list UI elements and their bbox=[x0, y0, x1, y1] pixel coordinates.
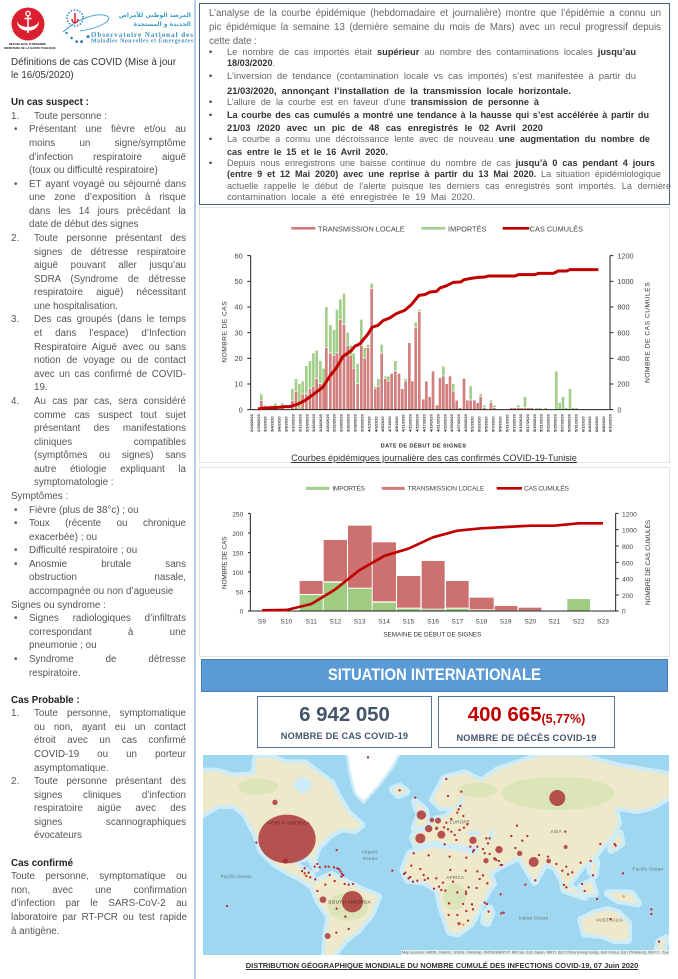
date labels: 6/4/2020 bbox=[587, 416, 592, 432]
axis labels: semaines: S10 bbox=[280, 619, 293, 626]
date labels: 3/4/2020 bbox=[270, 416, 275, 432]
date labels: 3/16/2020 bbox=[311, 413, 316, 432]
text block: définitions de cas: Toute personne : bbox=[34, 111, 107, 122]
date labels: 6/2/2020 bbox=[580, 416, 585, 432]
text block: définitions de cas: date de début des signes bbox=[29, 219, 138, 230]
axis title: nombre de cas: NOMBRE DE CAS bbox=[221, 536, 228, 589]
text block: définitions de cas: présentant des manifestations bbox=[34, 423, 186, 434]
text block: définitions de cas: COVID-19 ou un porteur bbox=[34, 749, 186, 760]
map labels: Indian Ocean bbox=[519, 916, 549, 921]
logo: observatoire national: المرصد الوطني للأمراض bbox=[119, 11, 191, 19]
date labels: 5/23/2020 bbox=[546, 413, 551, 432]
text block: définitions de cas: cliniques compatibles bbox=[34, 437, 186, 448]
text block: définitions de cas: 1. bbox=[11, 708, 19, 719]
text block: définitions de cas: signes cliniques d’infection bbox=[34, 790, 186, 801]
text block: définitions de cas: avec un cas confirmé de COVID- bbox=[34, 369, 186, 380]
date labels: 4/1/2020 bbox=[366, 416, 371, 432]
date labels: 5/27/2020 bbox=[560, 413, 565, 432]
text block: analyse: contamination locale a été enregistrée le 19 Mai 2020. bbox=[227, 192, 475, 203]
text block: définitions de cas: • bbox=[14, 518, 17, 529]
bars: importés bbox=[261, 284, 577, 410]
date labels: 4/5/2020 bbox=[380, 416, 385, 432]
legend: CAS CUMULÉS bbox=[530, 224, 583, 233]
legend bbox=[291, 224, 583, 233]
axis labels: right bbox=[617, 251, 634, 414]
date labels: 4/11/2020 bbox=[401, 414, 406, 432]
text block: définitions de cas: étroit avec un cas confirmé bbox=[34, 735, 186, 746]
date labels: 5/11/2020 bbox=[504, 414, 509, 432]
stat: nombre de décès: 400 665(5,77%) bbox=[468, 704, 585, 726]
axis labels: left: 100 bbox=[232, 570, 244, 577]
axis labels: right: 600 bbox=[622, 560, 633, 567]
date labels: 4/21/2020 bbox=[435, 413, 440, 432]
map labels: ASIA bbox=[551, 829, 562, 834]
text block: définitions de cas: dans les 14 jours précédant la bbox=[29, 206, 186, 217]
axis labels: right: 400 bbox=[617, 354, 630, 363]
logo: ministry of health emblem bbox=[4, 8, 56, 50]
date labels: 4/27/2020 bbox=[456, 413, 461, 432]
text block: définitions de cas: • bbox=[14, 654, 17, 665]
axis labels: right: 1200 bbox=[617, 251, 634, 260]
date labels: 3/30/2020 bbox=[359, 413, 364, 432]
axis labels: semaines: S23 bbox=[597, 619, 609, 626]
date labels: 3/14/2020 bbox=[304, 413, 309, 432]
text block: définitions de cas: une zone d’exposition à risque bbox=[29, 192, 186, 203]
panel: courbe journalière bbox=[199, 207, 670, 463]
date labels: 4/19/2020 bbox=[428, 413, 433, 432]
text block: définitions de cas: d’infection respiratoire aiguë bbox=[29, 152, 186, 163]
caption: distribution mondiale: DISTRIBUTION GÉOGRAPHIQUE MONDIALE DU NOMBRE CUMULÉ DES INFECTIONS COVID-19, 07 Juin 2020 bbox=[246, 961, 638, 970]
text block: définitions de cas: • bbox=[14, 559, 17, 570]
legend: CAS CUMULÉS bbox=[524, 484, 570, 493]
text block: définitions de cas: comme cas suspect tout sujet bbox=[34, 410, 186, 421]
text block: définitions de cas: accompagnée ou non d’agueusie bbox=[29, 586, 173, 597]
text block: définitions de cas: signes de détresse respiratoire bbox=[34, 247, 186, 258]
axis title: nombre de cas cumulés: NOMBRE DE CAS CUMULÉS bbox=[643, 520, 652, 605]
axis labels: right: 1200 bbox=[622, 512, 637, 519]
date labels: 5/3/2020 bbox=[477, 416, 482, 432]
text block: définitions de cas: à antigène. bbox=[11, 926, 59, 936]
date labels: 5/31/2020 bbox=[573, 413, 578, 432]
text block: définitions de cas: le 16/05/2020) bbox=[11, 70, 74, 81]
date labels: 2/29/2020 bbox=[256, 413, 261, 432]
date labels: 6/8/2020 bbox=[601, 416, 606, 432]
logo: ministry of health emblem: MINISTERE DE LA SANTE PUBLIQUE bbox=[4, 46, 56, 50]
text block: définitions de cas: respiratoire aigüe avec des bbox=[34, 803, 186, 814]
text block: analyse: L’analyse de la courbe épidémique (hebdomadaire et journalière) montre que l’épidémie a connu un bbox=[209, 8, 661, 19]
text block: définitions de cas: respiratoire. bbox=[29, 668, 81, 679]
date labels: 5/19/2020 bbox=[532, 413, 537, 432]
text block: définitions de cas: pneumonie ; ou bbox=[29, 640, 97, 651]
text block: analyse: • bbox=[209, 110, 212, 120]
axis labels: right: 800 bbox=[617, 303, 630, 312]
banner: situation internationale: SITUATION INTERNATIONALE bbox=[328, 666, 541, 684]
text block: analyse: cette date : bbox=[209, 36, 257, 47]
bars: importés bbox=[300, 583, 590, 611]
text block: définitions de cas: exacerbée) ; ou bbox=[29, 532, 97, 543]
text block: définitions de cas: Symptômes : bbox=[11, 491, 68, 502]
axis labels: semaines: S13 bbox=[354, 619, 366, 626]
text block: définitions de cas: Toute personne présentant des bbox=[34, 776, 186, 787]
date labels bbox=[249, 413, 613, 432]
legend: TRANSMISSION LOCALE bbox=[318, 224, 405, 233]
text block: définitions de cas bbox=[11, 56, 187, 936]
text block: définitions de cas: Un cas suspect : bbox=[11, 97, 89, 108]
axes bbox=[248, 513, 619, 611]
axis labels: left: 20 bbox=[235, 354, 243, 363]
text block: définitions de cas: non, avec une confirmation bbox=[11, 885, 187, 896]
text block: définitions de cas: Difficulté respiratoire ; ou bbox=[29, 545, 137, 556]
text block: analyse: 21/03 /2020 avec un pic de 48 cas enregistrés le 02 Avril 2020 bbox=[227, 122, 543, 133]
date labels: 3/24/2020 bbox=[339, 413, 344, 432]
text block: définitions de cas: 19. bbox=[34, 382, 48, 393]
axis labels: left: 0 bbox=[239, 405, 243, 414]
text block: définitions de cas: Présentant une fièvre et/ou au bbox=[29, 124, 186, 135]
text block: analyse: 18/03/2020. bbox=[227, 58, 275, 68]
text block: définitions de cas: Au cas par cas, sera considéré bbox=[34, 396, 186, 407]
axis labels: right: 200 bbox=[622, 593, 633, 600]
axis labels: semaines bbox=[258, 619, 609, 626]
axis labels: right: 600 bbox=[617, 328, 630, 337]
date labels: 5/17/2020 bbox=[525, 413, 530, 432]
map labels bbox=[221, 819, 664, 923]
banner: situation internationale bbox=[201, 659, 668, 692]
axis labels: left: 60 bbox=[235, 251, 243, 260]
axis labels: right: 0 bbox=[622, 608, 626, 615]
text block: définitions de cas: asymptomatique. bbox=[34, 763, 109, 774]
axis title: nombre de cas cumulés: NOMBRE DE CAS CUMULÉS bbox=[642, 282, 651, 383]
date labels: 4/13/2020 bbox=[408, 413, 413, 432]
date labels: 4/9/2020 bbox=[394, 416, 399, 432]
text block: analyse: pic épidémique la semaine 13 (dernière semaine du mois de Mars) avec un recul progressif depuis bbox=[209, 22, 661, 33]
text block: définitions de cas: Respiratoire Aiguë avec ou sans bbox=[34, 342, 186, 353]
text block: définitions de cas: • bbox=[14, 545, 17, 556]
date labels: 2/24/2020 bbox=[249, 413, 254, 432]
map labels: Pacific Ocean bbox=[632, 866, 664, 871]
axis labels: left: 150 bbox=[232, 551, 244, 558]
map: distribution géographique mondiale: NORTH AMERICA bbox=[267, 821, 311, 826]
date labels: 3/10/2020 bbox=[290, 413, 295, 432]
date labels: 4/7/2020 bbox=[387, 416, 392, 432]
date labels: 4/25/2020 bbox=[449, 413, 454, 432]
axis labels: semaines: S14 bbox=[378, 619, 390, 626]
axis labels: semaines: S22 bbox=[573, 619, 585, 626]
text block: définitions de cas: aiguë pouvant aller jusqu’au bbox=[34, 260, 186, 271]
stat: nombre de décès: NOMBRE DE DÉCÈS COVID-19 bbox=[456, 733, 597, 743]
bars: transmission locale bbox=[300, 526, 541, 610]
axis labels: right bbox=[622, 512, 637, 615]
date labels: 6/6/2020 bbox=[594, 416, 599, 432]
map: distribution géographique mondiale: SOUTH AMERICA bbox=[328, 900, 372, 905]
text block: définitions de cas: notion de voyage ou de contact bbox=[34, 355, 186, 366]
date labels: 5/5/2020 bbox=[484, 416, 489, 432]
axis labels: semaines: S12 bbox=[329, 619, 342, 626]
logo: observatoire national: Maladies Nouvelles et Émergentes bbox=[91, 36, 194, 44]
chart: courbes hebdomadaires bbox=[221, 484, 652, 639]
text block: définitions de cas: Toute personne, symptomatique bbox=[34, 708, 186, 719]
text block: définitions de cas: SDRA (Syndrome de détresse bbox=[34, 274, 186, 285]
text block: définitions de cas: Toute personne, symptomatique ou bbox=[11, 871, 187, 882]
text block: analyse: La courbe des cas cumulés a montré une tendance à la hausse qui s’est accélérée à partir du bbox=[227, 110, 649, 120]
map credits: Map sources: HERE, Garmin, USGS, Intermap, INCREMENT P, NRCan, Esri Japan, METI, Esri China (Hong Kong), Esri Korea, Esri (Thailand), NGCC, Ope bbox=[402, 951, 669, 955]
legend: IMPORTÉS bbox=[332, 484, 366, 493]
date labels: 5/25/2020 bbox=[553, 413, 558, 432]
date labels: 4/15/2020 bbox=[415, 413, 420, 432]
text block: définitions de cas: (toux ou difficulté respiratoire) bbox=[29, 165, 158, 176]
date labels: 3/6/2020 bbox=[277, 416, 282, 432]
map: distribution géographique mondiale bbox=[203, 755, 669, 955]
greenland bbox=[347, 753, 400, 803]
text block: définitions de cas: et dans l’espace) d’Infection bbox=[34, 328, 186, 339]
text block: définitions de cas: autre étiologie expliquant la bbox=[34, 464, 186, 475]
text block: définitions de cas: (symptômes ou signes) sans bbox=[34, 450, 186, 461]
map labels: AFRICA bbox=[446, 875, 464, 880]
map labels: AUSTRALIA bbox=[596, 918, 623, 923]
text block: définitions de cas: Syndrome de détresse bbox=[29, 654, 186, 665]
axis labels: left bbox=[232, 512, 244, 615]
axis labels: left: 250 bbox=[232, 512, 244, 519]
date labels: 5/15/2020 bbox=[518, 413, 523, 432]
stat: nombre de cas bbox=[257, 696, 432, 748]
map labels: Ocean bbox=[363, 856, 377, 861]
axis labels: semaines: S15 bbox=[402, 619, 415, 626]
text block: définitions de cas: 1. bbox=[11, 111, 19, 122]
text block: analyse: (entre 9 et 12 Mai 2020) avec une reprise à partir du 13 Mai 2020. La situation épidémiologique bbox=[227, 169, 661, 179]
text block: définitions de cas: Anosmie brutale sans bbox=[29, 559, 186, 570]
legend: TRANSMISSION LOCALE bbox=[408, 486, 485, 493]
text block: analyse: • bbox=[209, 134, 212, 144]
date labels: 5/13/2020 bbox=[511, 413, 516, 432]
text block: analyse: L’inversion de tendance (contamination locale vs cas importés) s’est manifestée à partir du bbox=[227, 71, 636, 82]
text block: définitions de cas: 2. bbox=[11, 776, 19, 787]
text block: définitions de cas: ou non, ayant eu un contact bbox=[34, 722, 186, 733]
axis labels: left: 30 bbox=[235, 328, 243, 337]
axis labels: left: 10 bbox=[235, 380, 243, 389]
date labels: 5/7/2020 bbox=[491, 416, 496, 432]
text block: définitions de cas: Cas confirmé bbox=[11, 858, 73, 869]
axis labels: left: 40 bbox=[235, 303, 243, 312]
text block: analyse: Le nombre de cas importés était supérieur au nombre des contaminations locales jusqu’au bbox=[227, 47, 636, 57]
text block: définitions de cas: obstruction nasale, bbox=[29, 572, 186, 583]
logo: observatoire national: Observatoire National des bbox=[91, 31, 193, 39]
text block: analyse: La courbe a connu une décroissance lente avec de nouveau une augmentation du nombre de bbox=[227, 134, 650, 144]
line: cas cumulés bbox=[258, 270, 598, 409]
legend: IMPORTÉS bbox=[448, 224, 486, 233]
date labels: 3/8/2020 bbox=[283, 416, 288, 432]
text block: définitions de cas: Définitions de cas COVID (Mise à jour bbox=[11, 56, 176, 68]
stat: nombre de cas: NOMBRE DE CAS COVID-19 bbox=[281, 731, 408, 741]
axes bbox=[247, 256, 613, 410]
date labels: 4/23/2020 bbox=[442, 413, 447, 432]
date labels: 5/9/2020 bbox=[497, 416, 502, 432]
text block: définitions de cas: Des cas groupés (dans le temps bbox=[34, 314, 186, 325]
logo: observatoire national bbox=[62, 9, 194, 44]
text block: définitions de cas: correspondant à une bbox=[29, 627, 186, 638]
text block: définitions de cas: symptomatologie : bbox=[34, 477, 114, 488]
date labels: 3/2/2020 bbox=[263, 416, 268, 432]
date labels: 3/20/2020 bbox=[325, 413, 330, 432]
logo: observatoire national: الجديدة و المستجدة bbox=[134, 21, 191, 28]
text block: analyse: • bbox=[209, 71, 212, 81]
date labels: 5/1/2020 bbox=[470, 416, 475, 432]
date labels: 3/28/2020 bbox=[353, 413, 358, 432]
axis labels: right: 800 bbox=[622, 544, 633, 551]
legend bbox=[306, 484, 570, 493]
text block: définitions de cas: évocateurs bbox=[34, 830, 82, 841]
text block: définitions de cas: d’infection par le SARS-CoV-2 au bbox=[11, 898, 187, 909]
text block: définitions de cas: ET ayant voyagé ou séjourné dans bbox=[29, 179, 186, 190]
axis labels: right: 1000 bbox=[617, 277, 634, 286]
text block: analyse: • bbox=[209, 158, 212, 168]
date labels: 3/26/2020 bbox=[346, 413, 351, 432]
date labels: 5/21/2020 bbox=[539, 413, 544, 432]
axis title: nombre de cas: NOMBRE DE CAS bbox=[222, 301, 229, 363]
axis labels: semaines: S20 bbox=[524, 619, 537, 626]
date labels: 3/18/2020 bbox=[318, 413, 323, 432]
stat: nombre de cas: 6 942 050 bbox=[299, 704, 390, 726]
date labels: 4/3/2020 bbox=[373, 416, 378, 432]
text block: définitions de cas: signes scannographiques bbox=[34, 817, 186, 828]
date labels: 5/29/2020 bbox=[566, 413, 571, 432]
date labels: 6/10/2020 bbox=[608, 413, 613, 432]
text block: définitions de cas: Toux (récente ou chronique bbox=[29, 518, 186, 529]
axis title: semaine: SEMAINE DE DÉBUT DE SIGNES bbox=[383, 630, 481, 639]
text block: définitions de cas: 4. bbox=[11, 396, 19, 407]
stat: nombre de décès bbox=[438, 696, 615, 748]
text block: définitions de cas: • bbox=[14, 179, 17, 190]
line: cas cumulés bbox=[262, 523, 603, 610]
text block: définitions de cas: Cas Probable : bbox=[11, 695, 80, 706]
text block: analyse: actuelle rappelle le début de l’alerte puisque les derniers cas enregistrés sont importés. La dernière bbox=[227, 181, 671, 191]
axis labels: left bbox=[235, 251, 243, 414]
text block: définitions de cas: laboratoire par RT-PCR ou test rapide bbox=[11, 912, 187, 923]
axis labels: left: 0 bbox=[240, 608, 244, 615]
axis labels: left: 200 bbox=[232, 531, 244, 538]
text block: définitions de cas: Toute personne présentant des bbox=[34, 233, 186, 244]
panel: analyse de la courbe épidémique bbox=[199, 3, 670, 205]
map labels: EUROPE bbox=[450, 819, 470, 824]
text block: définitions de cas: 2. bbox=[11, 233, 19, 244]
axis labels: semaines: S19 bbox=[500, 619, 512, 626]
water bodies bbox=[294, 777, 494, 841]
axis labels: semaines: S9 bbox=[258, 619, 266, 626]
panel: courbe hebdomadaire bbox=[199, 467, 670, 657]
axis labels: semaines: S18 bbox=[475, 619, 488, 626]
logo: ministry of health emblem: REPUBLIQUE TUNISIENNE bbox=[9, 42, 46, 46]
text block: définitions de cas: Signes radiologiques d’infiltrats bbox=[29, 613, 186, 624]
date labels: 3/12/2020 bbox=[297, 413, 302, 432]
text block: définitions de cas: respiratoire aiguë) nécessitant bbox=[34, 287, 186, 298]
date labels: 4/17/2020 bbox=[422, 413, 427, 432]
map labels: Pacific Ocean bbox=[221, 874, 252, 879]
axis labels: semaines: S16 bbox=[427, 619, 439, 626]
text block: définitions de cas: moins un signe/symptôme bbox=[29, 138, 186, 149]
text block: définitions de cas: Fièvre (plus de 38°c) ; ou bbox=[29, 505, 139, 516]
text block: définitions de cas: une hospitalisation. bbox=[34, 301, 118, 312]
axis labels: right: 200 bbox=[617, 380, 630, 389]
text block: analyse: • bbox=[209, 47, 212, 57]
map labels: Atlantic bbox=[362, 850, 379, 855]
axis labels: left: 50 bbox=[236, 590, 244, 597]
text block: définitions de cas: • bbox=[14, 124, 17, 135]
date labels: 4/29/2020 bbox=[463, 413, 468, 432]
axis labels: semaines: S21 bbox=[548, 619, 561, 626]
axis title: date: DATE DE DÉBUT DE SIGNES bbox=[381, 442, 466, 450]
axis labels: semaines: S17 bbox=[451, 619, 464, 626]
date labels: 3/22/2020 bbox=[332, 413, 337, 432]
text block: analyse: 21/03/2020, annonçant l’installation de la transmission locale horizontale. bbox=[227, 85, 571, 96]
axis labels: right: 0 bbox=[617, 405, 621, 414]
axis labels: semaines: S11 bbox=[306, 619, 317, 626]
text block: analyse: • bbox=[209, 97, 212, 107]
chart: courbes journalières bbox=[222, 224, 651, 450]
caption: courbes journalières: Courbes épidémiques journalière des cas confirmés COVID-19-Tunisie bbox=[291, 453, 577, 463]
text block: analyse: cas entre le 15 et le 16 Avril 2020. bbox=[227, 147, 388, 157]
text block: analyse bbox=[209, 8, 671, 203]
axis labels: right: 400 bbox=[622, 577, 633, 584]
bubbles: cas par pays bbox=[227, 757, 659, 942]
text block: définitions de cas: 3. bbox=[11, 314, 19, 325]
land tints bbox=[238, 777, 615, 921]
axis labels: right: 1000 bbox=[622, 528, 637, 535]
text block: analyse: Depuis nous enregistrons une baisse continue du nombre de cas jusqu’à 0 cas pendant 4 jours bbox=[227, 158, 655, 168]
axis labels: left: 50 bbox=[235, 277, 243, 286]
divider: left column rule bbox=[194, 0, 196, 979]
text block: définitions de cas: • bbox=[14, 505, 17, 516]
bars: transmission locale bbox=[261, 289, 532, 410]
text block: définitions de cas: • bbox=[14, 613, 17, 624]
text block: définitions de cas: Signes ou syndrome : bbox=[11, 600, 106, 611]
